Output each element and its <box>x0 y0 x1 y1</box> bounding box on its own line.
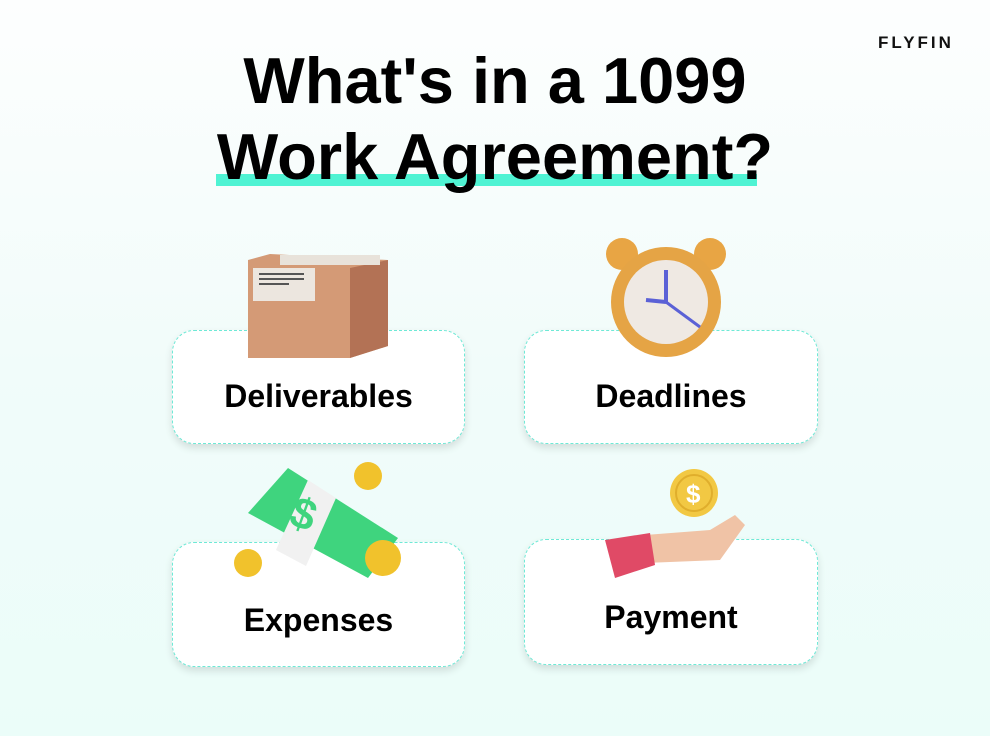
title: Work Agreement? <box>217 120 773 193</box>
title underline <box>216 174 757 186</box>
icon: money <box>234 462 401 578</box>
icon: money: $ <box>283 487 323 542</box>
card: expenses: Expenses <box>244 602 393 638</box>
card: payment: Payment <box>604 599 738 635</box>
card: deliverables: Deliverables <box>224 378 413 414</box>
title: What's in a 1099 <box>243 44 747 117</box>
card: deadlines <box>524 330 818 444</box>
card: payment <box>524 539 818 665</box>
card: deadlines: Deadlines <box>595 378 747 414</box>
icon: box <box>248 254 388 358</box>
title <box>217 44 773 193</box>
card: deliverables <box>172 330 465 444</box>
logo: FLYFIN <box>878 33 954 52</box>
icon: alarm clock <box>606 238 726 357</box>
card: expenses <box>172 542 465 667</box>
icon: hand with coin <box>605 469 745 578</box>
icon: hand with coin: $ <box>686 479 701 509</box>
